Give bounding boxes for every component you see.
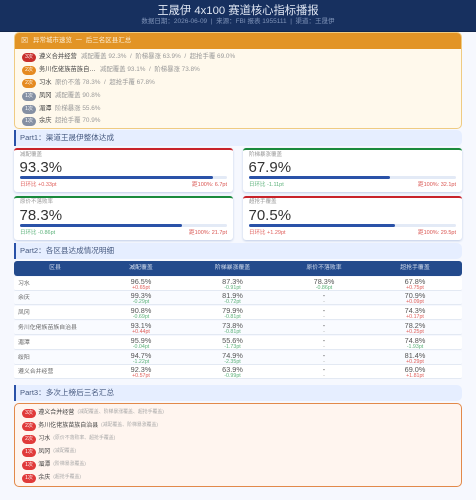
table row: 湄潭: [14, 336, 462, 350]
row: 务川: 务川仡佬族苗族自…: [39, 66, 96, 72]
table row: 绥阳: 94.7%: [131, 350, 151, 360]
row: 遵义合并经营: [22, 52, 235, 62]
row: 余庆: [22, 474, 81, 483]
table row: 务川: 93.1%: [131, 321, 151, 330]
table row: 湄潭: 55.6%: [222, 336, 243, 345]
card: 阶梯暴涨覆盖: 日环比 -1.11pt: [249, 182, 284, 188]
table row: 务川: +0.44pt: [132, 329, 150, 335]
table row: 习水: 67.8%: [405, 276, 425, 286]
table row: 务川: -: [323, 321, 325, 330]
row: 余庆: 余庆: [39, 117, 52, 124]
table row: 湄潭: 74.8%: [405, 336, 425, 345]
row: 余庆: 1次: [25, 474, 33, 480]
card: 超抢手覆盖: 距100%: 29.5pt: [418, 230, 456, 236]
row: 遵义合并经营: 减配覆盖 92.3% / 阶梯暴涨 63.9% / 超抢手覆 69.0%: [81, 52, 235, 60]
card: 超抢手覆盖: 70.5%: [248, 206, 291, 224]
table row: 务川: [14, 321, 462, 335]
row: 务川: (减配覆盖、阶梯暴涨覆盖): [101, 422, 158, 428]
row: 遵义合并经营: 3次: [25, 410, 33, 416]
table row: 凤冈: 凤冈: [18, 310, 30, 316]
table header: 阶梯暴涨覆盖: [215, 265, 250, 271]
row: 余庆: [22, 116, 100, 126]
table row: 绥阳: 81.4%: [405, 350, 425, 360]
heading: Part3: Part3：多次上榜后三名汇总: [20, 388, 114, 397]
row: 凤冈: 1次: [25, 92, 33, 98]
row: 湄潭: 湄潭: [38, 462, 50, 468]
table row: 习水: -0.91pt: [224, 284, 241, 290]
table row: 遵义合并经营: 69.0%: [405, 365, 425, 374]
table row: 务川: 务川仡佬族苗族自治县: [18, 325, 77, 331]
table row: 习水: +0.75pt: [406, 284, 424, 290]
table row: 湄潭: -0.04pt: [133, 344, 149, 350]
table row: 遵义合并经营: -0.99pt: [224, 373, 241, 379]
table row: 习水: [14, 276, 462, 290]
table row: 凤冈: 90.8%: [131, 306, 151, 315]
panel: repeat listings: [14, 403, 462, 487]
card: 超抢手覆盖: 日环比 +1.29pt: [249, 230, 286, 236]
heading: Part2: [14, 243, 462, 258]
row: 湄潭: 湄潭: [39, 104, 52, 112]
row: 湄潭: 阶梯暴涨 55.6%: [55, 104, 100, 112]
table row: 绥阳: +0.29pt: [406, 358, 424, 364]
card: 超抢手覆盖: 超抢手覆盖: [249, 199, 277, 205]
row: 遵义合并经营: 3次: [25, 54, 33, 60]
table row: 习水: 96.5%: [131, 276, 151, 286]
table row: 务川: -0.81pt: [224, 329, 241, 335]
table row: 绥阳: [14, 350, 462, 364]
row: 凤冈: 1次: [25, 448, 33, 454]
table row: 湄潭: -1.73pt: [224, 344, 241, 350]
row: 湄潭: [22, 104, 100, 114]
row: 务川: 2次: [25, 66, 33, 72]
table row: 习水: 78.3%: [314, 276, 334, 286]
row: 习水: [22, 78, 155, 88]
row: 凤冈: [22, 92, 100, 101]
table header: 超抢手覆盖: [400, 265, 430, 271]
card: 原价不落败率: 距100%: 21.7pt: [189, 230, 227, 236]
card: 超抢手覆盖: [243, 196, 462, 240]
row: 习水: 习水: [38, 436, 50, 442]
table row: 余庆: 81.9%: [222, 291, 243, 300]
table row: 湄潭: -: [323, 336, 325, 345]
table row: 绥阳: -1.22pt: [133, 358, 149, 364]
card: 原价不落败率: [14, 196, 233, 240]
header banner: [0, 0, 476, 32]
row: 习水: 原价不落 78.3% / 超抢手覆 67.8%: [55, 78, 155, 86]
table row: 习水: -0.86pt: [316, 284, 332, 290]
table row: 凤冈: 74.3%: [405, 306, 425, 315]
table row: 遵义合并经营: 遵义合并经营: [18, 369, 53, 375]
row: 凤冈: 凤冈: [39, 92, 52, 98]
heading: Part1: Part1：渠道王晟伊整体达成: [20, 133, 114, 142]
table row: 遵义合并经营: 92.3%: [131, 365, 151, 374]
row: 湄潭: 1次: [25, 106, 33, 112]
table row: 绥阳: -2.35pt: [224, 358, 241, 364]
table row: 余庆: 70.9%: [405, 291, 425, 300]
row: 湄潭: [22, 460, 86, 470]
row: 务川: 务川仡佬族苗族自治县: [38, 422, 98, 428]
panel: abnormal cities: [14, 32, 462, 129]
row: 凤冈: (减配覆盖): [53, 448, 76, 454]
row: 务川: [22, 66, 200, 75]
table row: 务川: 73.8%: [222, 321, 243, 330]
row: 余庆: (超抢手覆盖): [53, 474, 81, 480]
table row: 凤冈: 79.9%: [222, 306, 243, 315]
row: 遵义合并经营: (减配覆盖、阶梯暴涨覆盖、超抢手覆盖): [78, 410, 164, 414]
table row: 遵义合并经营: -: [323, 365, 325, 374]
row: 凤冈: 减配覆盖 90.8%: [55, 92, 100, 98]
table header: 区县: [49, 265, 61, 271]
row: 遵义合并经营: 遵义合并经营: [38, 410, 74, 416]
table row: 余庆: -0.72pt: [224, 299, 241, 305]
table row: 湄潭: -: [323, 344, 325, 350]
row: 余庆: 1次: [25, 118, 33, 124]
row: 务川: [22, 421, 158, 431]
table row: 凤冈: -: [323, 314, 325, 320]
table row: 凤冈: +0.17pt: [406, 314, 424, 320]
table row: 余庆: 余庆: [18, 295, 30, 301]
table row: 湄潭: 湄潭: [18, 340, 30, 346]
row: 务川: 减配覆盖 93.1% / 阶梯暴涨 73.8%: [100, 66, 200, 72]
table row: 务川: -: [323, 329, 325, 335]
row: 务川: 2次: [25, 422, 33, 428]
table row: 遵义合并经营: +1.81pt: [406, 373, 424, 379]
row: 湄潭: 1次: [25, 462, 33, 468]
table header: 减配覆盖: [129, 265, 153, 271]
table row: 务川: 78.2%: [405, 321, 425, 330]
table row: 凤冈: -0.81pt: [224, 314, 241, 320]
table: district details: [14, 261, 462, 379]
table row: 习水: 习水: [18, 280, 30, 286]
row: 习水: 习水: [39, 78, 52, 86]
card: 原价不落败率: 原价不落败率: [20, 199, 53, 205]
row: 余庆: 余庆: [38, 474, 50, 480]
row: 凤冈: 凤冈: [38, 448, 50, 454]
card: 减配覆盖: [14, 148, 233, 192]
row: 习水: (原价不落败率、超抢手覆盖): [53, 436, 115, 440]
card: 原价不落败率: 78.3%: [20, 206, 62, 224]
card: 减配覆盖: 93.3%: [20, 159, 62, 176]
table header: 原价不落败率: [306, 265, 342, 271]
table row: 湄潭: -1.93pt: [407, 344, 423, 350]
row: 凤冈: [22, 448, 76, 457]
card: 减配覆盖: 距100%: 6.7pt: [192, 182, 227, 188]
card: 阶梯暴涨覆盖: 67.9%: [248, 159, 291, 176]
table row: 凤冈: -0.69pt: [133, 314, 149, 320]
row: 遵义合并经营: [22, 408, 164, 418]
row: 湄潭: (阶梯暴涨覆盖): [53, 462, 86, 466]
table row: 遵义合并经营: [14, 365, 462, 379]
card: 阶梯暴涨覆盖: [243, 148, 462, 192]
row: 遵义合并经营: 遵义合并经营: [39, 52, 77, 60]
table row: 余庆: 99.3%: [131, 291, 151, 300]
table row: 绥阳: -: [323, 350, 325, 360]
table row: 绥阳: -: [323, 358, 325, 364]
card: 减配覆盖: 减配覆盖: [20, 152, 42, 158]
title: 王晟伊 4x100 赛道核心指标播报: [157, 5, 319, 17]
table row: 余庆: -0.29pt: [133, 299, 149, 305]
card: 阶梯暴涨覆盖: 距100%: 32.1pt: [418, 182, 456, 188]
row: 习水: 2次: [25, 436, 33, 442]
card: 减配覆盖: 日环比 +0.33pt: [20, 182, 57, 188]
table row: 遵义合并经营: -: [323, 373, 325, 379]
table row: 绥阳: 绥阳: [18, 354, 30, 360]
table header: [14, 261, 462, 276]
table row: 凤冈: -: [323, 306, 325, 315]
subtitle: 数据日期：2026-06-09 | 来源：FBI 报表 1955111 | 渠道：王晟伊: [141, 18, 335, 25]
heading: Part2: Part2：各区县达成情况明细: [20, 246, 114, 255]
row: 余庆: 超抢手覆 70.9%: [55, 117, 100, 124]
table row: 习水: +0.65pt: [132, 284, 150, 290]
panel heading: [15, 33, 461, 49]
row: 习水: 2次: [25, 80, 33, 86]
card: 原价不落败率: 日环比 -0.86pt: [20, 230, 55, 236]
table row: 务川: +0.25pt: [406, 329, 424, 335]
heading: Part3: [14, 385, 462, 400]
panel heading: 异常城市速览 一 后三名区县汇总: [33, 37, 131, 44]
table row: 习水: 87.3%: [222, 276, 243, 286]
heading: Part1: [14, 130, 462, 146]
table row: 湄潭: 95.9%: [131, 336, 151, 345]
table row: 余庆: +0.09pt: [406, 299, 424, 305]
panel heading: ☒: [21, 36, 28, 45]
table row: 遵义合并经营: 63.9%: [222, 365, 243, 374]
row: 习水: [22, 434, 115, 444]
table row: 遵义合并经营: +0.57pt: [132, 373, 150, 379]
table row: 余庆: -: [323, 299, 325, 305]
table row: 余庆: -: [323, 291, 325, 300]
table row: 凤冈: [14, 306, 462, 320]
card: 阶梯暴涨覆盖: 阶梯暴涨覆盖: [249, 152, 282, 158]
table row: 余庆: [14, 291, 462, 305]
table row: 绥阳: 74.9%: [222, 350, 243, 360]
